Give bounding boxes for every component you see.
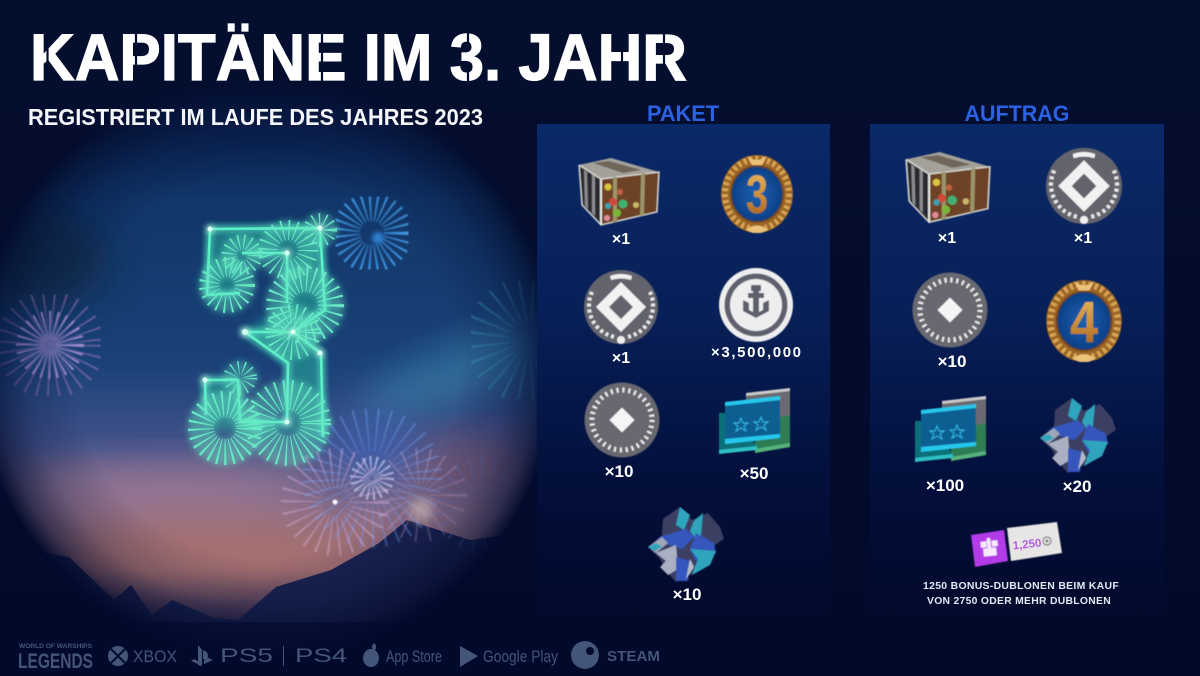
chest ×1: ×1	[612, 231, 630, 248]
panel: Auftrag	[870, 124, 1164, 640]
disk ×10: ×10	[938, 352, 966, 371]
disk ×10	[584, 382, 660, 481]
illustration: fireworks sky with glowing number 3	[0, 95, 537, 622]
bonus ticket: 1,250	[1012, 538, 1042, 552]
silver laurel emblem ×1: ×1	[612, 350, 630, 367]
logo: Google Play: Google Play	[483, 647, 558, 666]
heading: Auftrag: AUFTRAG	[964, 101, 1070, 126]
flags ×100: ×100	[926, 476, 964, 495]
logo: Xbox	[108, 646, 177, 666]
wolf camouflage ×20	[1040, 398, 1116, 496]
title: KAPITÄNE IM 3. JAHR	[30, 20, 687, 94]
silver laurel emblem ×1	[584, 270, 658, 367]
logo: World of Warships Legends: LEGENDS	[18, 650, 93, 673]
logo: Google Play	[460, 646, 558, 667]
logo: Xbox: XBOX	[133, 647, 177, 666]
chest ×1	[906, 152, 990, 247]
wolf camouflage ×10	[648, 507, 724, 604]
medal level 3: 3	[746, 165, 768, 225]
wolf camouflage ×20: ×20	[1063, 477, 1091, 496]
credits ×3,500,000: ×3,500,000	[711, 344, 801, 361]
logo: PS4: PS4	[295, 646, 348, 667]
logo: World of Warships Legends	[18, 644, 93, 673]
panel: Paket	[537, 124, 830, 640]
logo: PS5	[191, 645, 273, 667]
bonus text: VON 2750 ODER MEHR DUBLONEN	[927, 595, 1111, 607]
footer platform logos	[18, 641, 660, 673]
medal level 3	[721, 155, 793, 233]
logo: Steam	[571, 641, 660, 669]
flags ×50: ×50	[740, 464, 768, 483]
firework: blue	[346, 207, 398, 259]
firework: purple	[14, 309, 86, 381]
firework: dim teal right	[488, 298, 572, 382]
chest ×1	[579, 158, 659, 248]
bonus ticket	[971, 522, 1062, 567]
subtitle: REGISTRIERT IM LAUFE DES JAHRES 2023	[28, 104, 483, 130]
logo: App Store: App Store	[386, 647, 442, 666]
flags ×50	[719, 388, 790, 483]
mountains	[48, 520, 498, 622]
firework: low blue and pink	[301, 430, 510, 536]
medal level 4	[1046, 280, 1122, 362]
logo: PS4	[283, 646, 348, 667]
credits ×3,500,000	[711, 268, 801, 361]
logo: World of Warships Legends: WORLD OF WARSHIPS	[19, 644, 92, 650]
glowing number 3	[201, 220, 331, 452]
heading: Paket: PAKET	[647, 101, 720, 126]
bonus text	[923, 580, 1119, 607]
disk ×10	[912, 272, 988, 371]
bonus text: 1250 BONUS-DUBLONEN BEIM KAUF	[923, 580, 1119, 592]
silver laurel emblem ×1: ×1	[1074, 230, 1092, 247]
silver laurel emblem ×1	[1046, 148, 1122, 247]
logo: PS5: PS5	[220, 646, 273, 667]
chest ×1: ×1	[938, 230, 956, 247]
disk ×10: ×10	[605, 462, 633, 481]
flags ×100	[915, 396, 986, 495]
logo: App Store	[363, 644, 442, 667]
logo: Steam: STEAM	[607, 648, 660, 665]
medal level 4: 4	[1070, 290, 1098, 355]
wolf camouflage ×10: ×10	[673, 585, 701, 604]
